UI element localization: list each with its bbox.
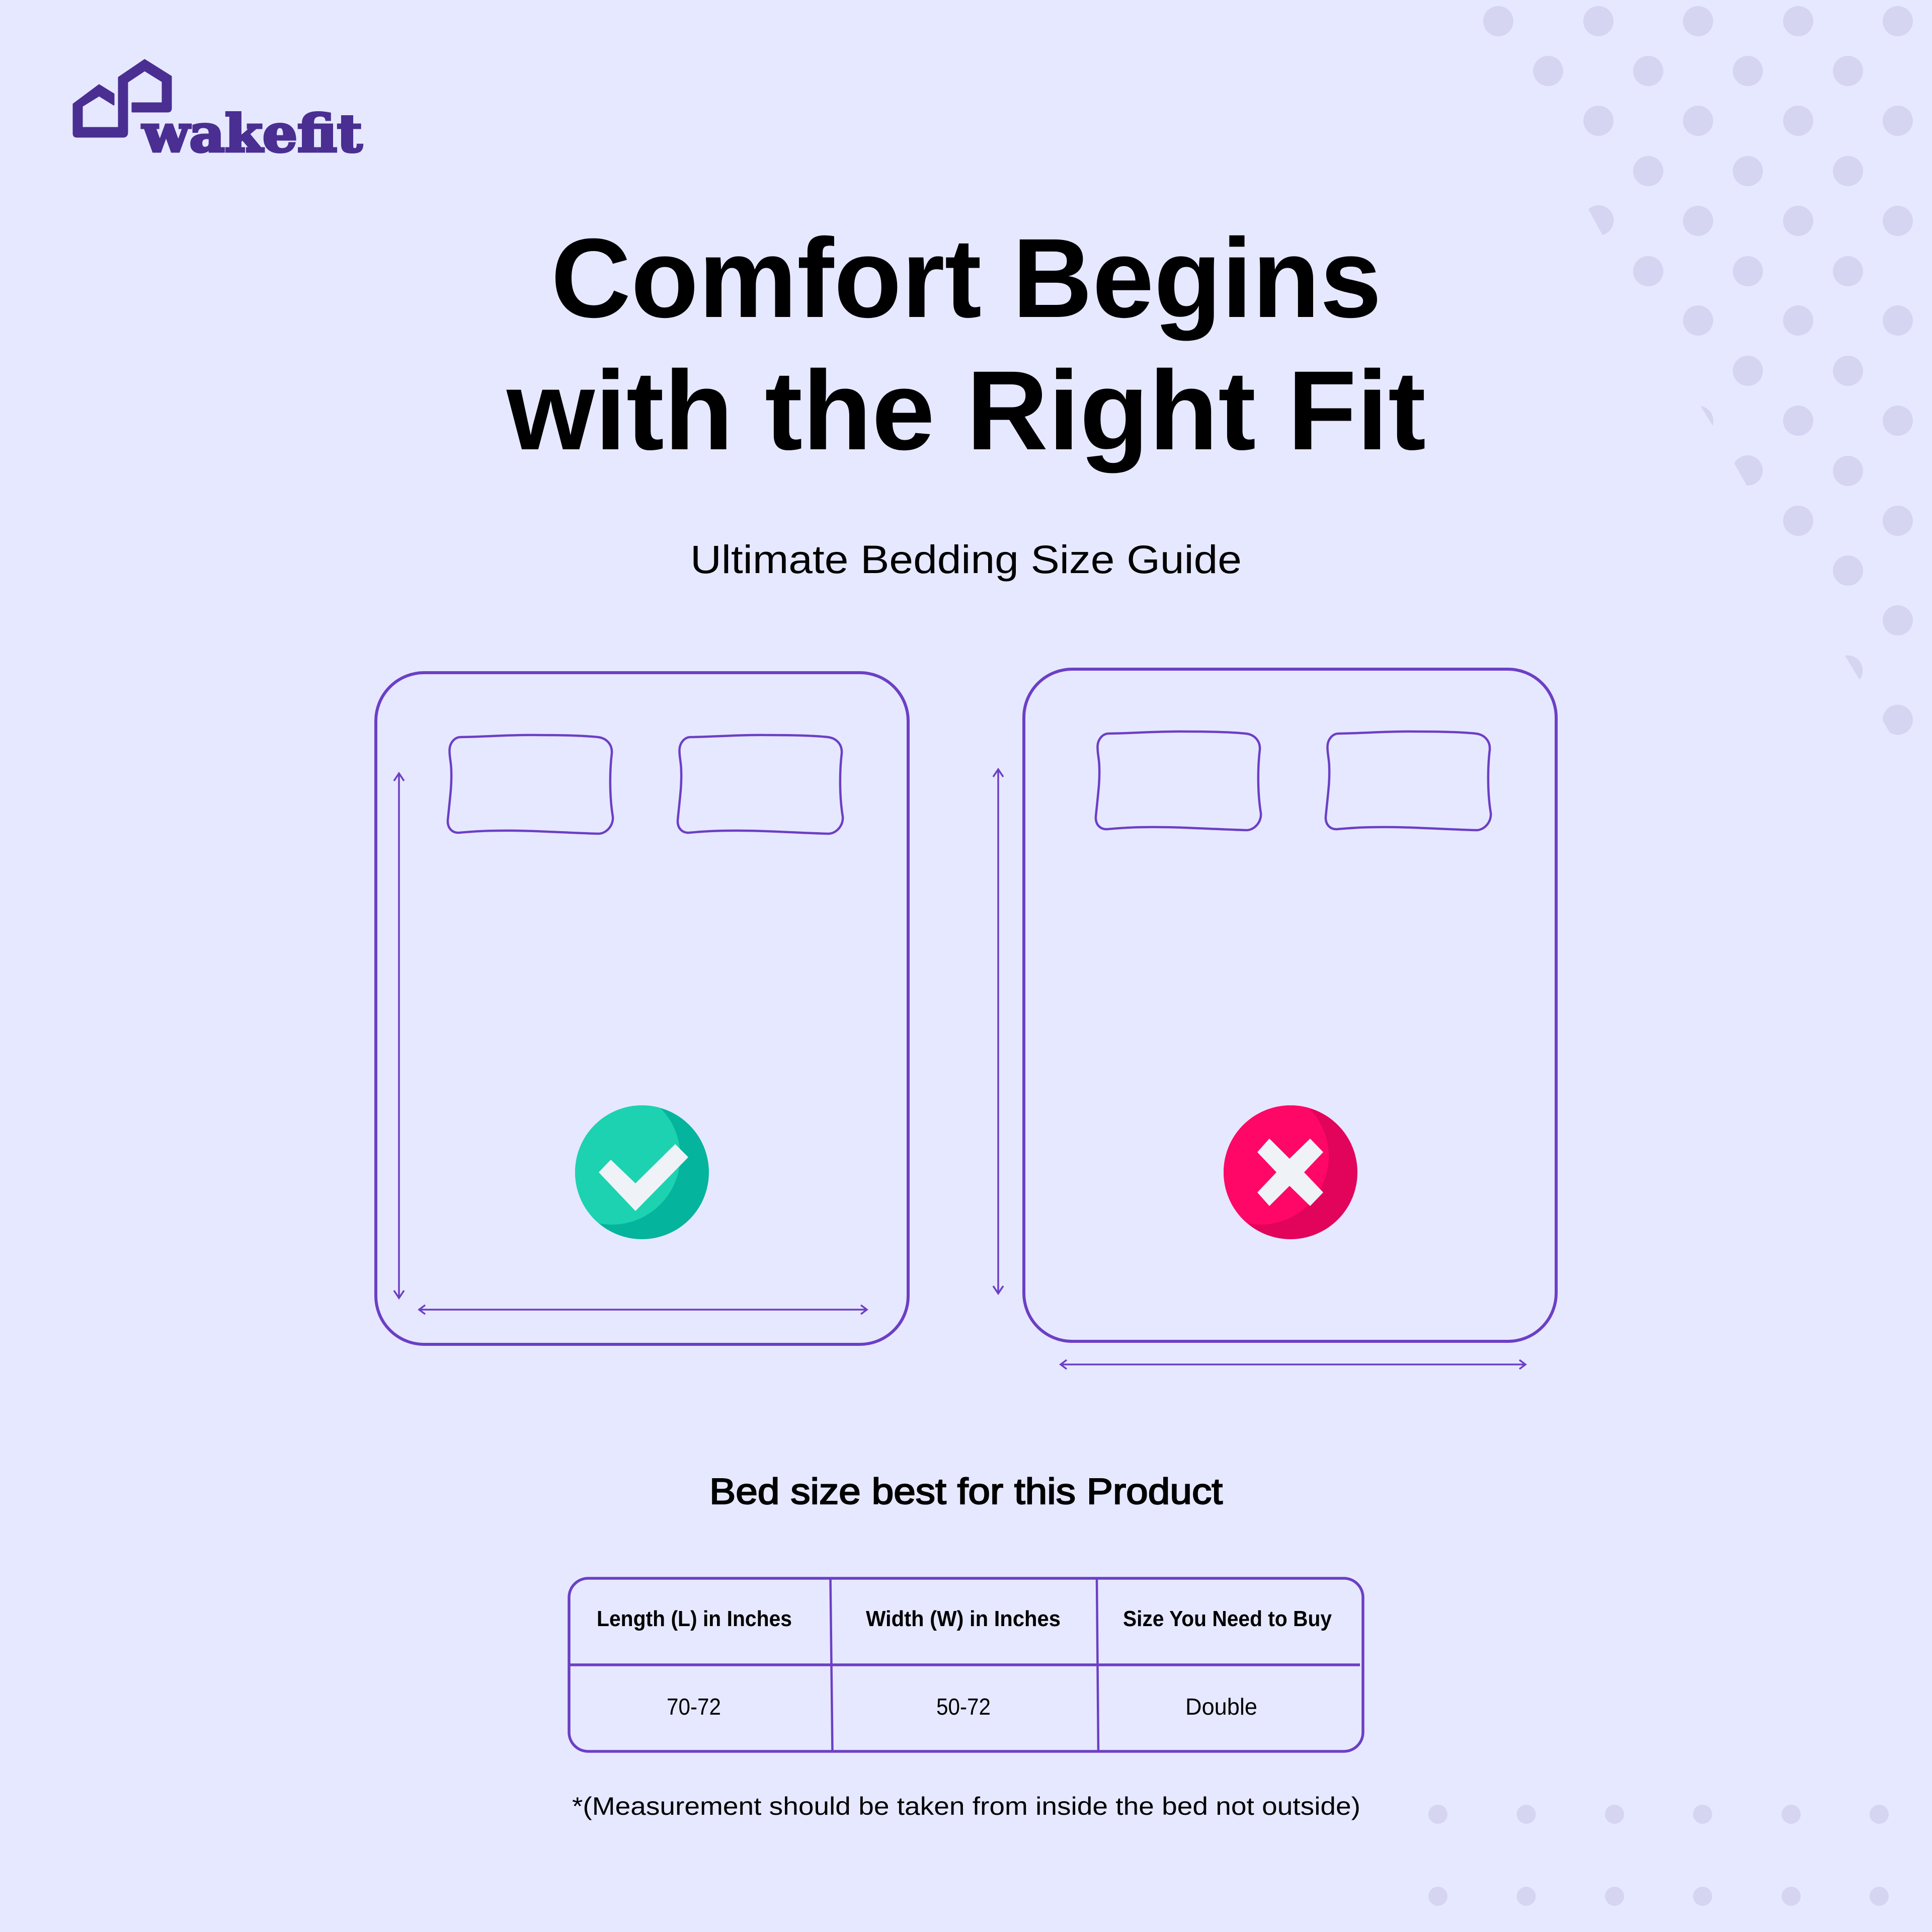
arrow: width [419,1305,867,1314]
arrow: length [394,773,404,1298]
arrow: length [993,769,1003,1294]
subtitle: Ultimate Bedding Size Guide [690,537,1242,582]
logo wordmark: wakefit [142,104,362,164]
panel: correct bed measurement [376,673,908,1344]
logo: wakefit [73,60,362,164]
table value row: 50-72 [936,1694,991,1720]
decorative dot pattern: bottom right [1428,1805,1889,1906]
table grid [569,1578,1363,1751]
bed outline [376,673,908,1344]
table header row: Length (L) in Inches [597,1606,792,1631]
pillow right [1326,732,1491,830]
table header row: Width (W) in Inches [866,1606,1061,1631]
table header row: Size You Need to Buy [1123,1606,1332,1631]
table value row: Double [1185,1694,1257,1720]
table header row [597,1606,1332,1631]
arrow: width [1061,1360,1525,1369]
icon: red cross [1224,1105,1357,1239]
title [506,215,1426,473]
pillow left [448,735,613,834]
bed outline [1024,669,1556,1341]
title: Comfort Begins [551,215,1382,341]
title: with the Right Fit [506,348,1426,473]
pillow right [678,735,843,834]
icon: green check [575,1105,709,1239]
footnote: *(Measurement should be taken from inside the bed not outside) [572,1792,1360,1820]
pillow left [1096,732,1261,830]
table value row: 70-72 [667,1694,721,1720]
decorative dot pattern: top right [1483,6,1913,735]
icon: two houses [73,60,171,137]
table: bed sizes [569,1578,1363,1751]
heading: bed size: Bed size best for this Product [709,1472,1223,1512]
table value row [667,1694,1257,1720]
panel: incorrect bed measurement [993,669,1556,1369]
